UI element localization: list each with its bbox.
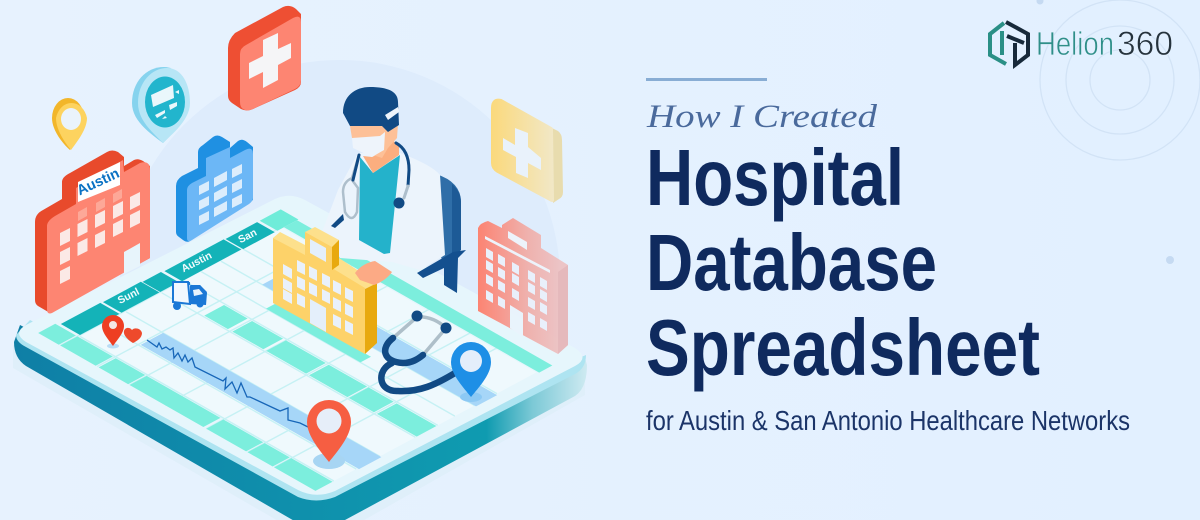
- cells: [80, 228, 536, 481]
- windows: [283, 260, 353, 335]
- windows: [486, 248, 547, 331]
- tower window: [310, 239, 326, 262]
- hair: [343, 87, 399, 132]
- grid lines: [60, 220, 550, 491]
- header labels: Sunl: [116, 286, 142, 307]
- isometric spreadsheet board: [13, 196, 587, 520]
- subtitle: for Austin & San Antonio Healthcare Networks: [646, 405, 1130, 436]
- sleeve cuff: [331, 214, 344, 228]
- neck stethoscope: [343, 143, 409, 218]
- neck: [363, 138, 399, 173]
- board side: [14, 325, 587, 520]
- header end cell: [260, 209, 298, 231]
- mask: [352, 132, 385, 157]
- header labels: [116, 227, 259, 307]
- red location pin: [307, 400, 351, 469]
- spreadsheet grid: [38, 206, 554, 492]
- face: [350, 124, 398, 158]
- pink hospital building: [478, 218, 568, 354]
- windows: [60, 192, 140, 284]
- header labels: Austin: [179, 250, 214, 275]
- scrubs: [359, 155, 400, 254]
- icon: red medical cross: [228, 6, 301, 110]
- mint rows: [38, 207, 552, 492]
- yellow plus sign card: [493, 101, 563, 203]
- logo: [990, 22, 1173, 65]
- faded windows: [78, 189, 122, 221]
- small red pin with heart: [102, 315, 142, 348]
- stethoscope: [381, 310, 455, 391]
- kicker: How I Created: How I Created: [646, 99, 878, 135]
- header cells: [61, 220, 275, 336]
- door: [310, 299, 326, 332]
- logo wordmark: 360: [1117, 25, 1173, 63]
- background circle behind doctor: [120, 60, 560, 500]
- blue location pin: [451, 342, 491, 402]
- blue highlighted rows: [141, 271, 497, 469]
- logo wordmark: Helion: [1036, 25, 1114, 62]
- header labels: San: [236, 227, 259, 246]
- icon: blue pin with ambulance: [132, 67, 190, 143]
- board rim: [16, 320, 586, 500]
- main title: Spreadsheet: [646, 303, 1040, 392]
- chair: [417, 174, 466, 293]
- board surface: [19, 196, 582, 495]
- Austin hospital building: [35, 150, 150, 314]
- ECG line: [147, 340, 308, 427]
- icon: yellow location pin: [52, 98, 87, 150]
- tower window: [508, 231, 527, 250]
- windows: [199, 164, 242, 225]
- Austin sign: Austin: [74, 166, 122, 199]
- doctor hand: [355, 261, 392, 285]
- board shadow: [13, 345, 585, 520]
- coat: [322, 153, 445, 270]
- logo mark: [990, 22, 1028, 65]
- decorative concentric circles: [1036, 0, 1200, 264]
- logo wordmark: [1036, 25, 1173, 63]
- heading rule: [646, 78, 767, 81]
- ambulance icon: [172, 282, 207, 310]
- yellow hospital building: [273, 227, 392, 354]
- main title: Database: [646, 218, 937, 307]
- main title: [646, 133, 1040, 392]
- doctor figure: [322, 87, 466, 293]
- cap band: [385, 107, 399, 120]
- main title: Hospital: [646, 133, 904, 222]
- door: [510, 305, 523, 337]
- roof band: [485, 236, 550, 273]
- blue hospital building: [176, 136, 253, 242]
